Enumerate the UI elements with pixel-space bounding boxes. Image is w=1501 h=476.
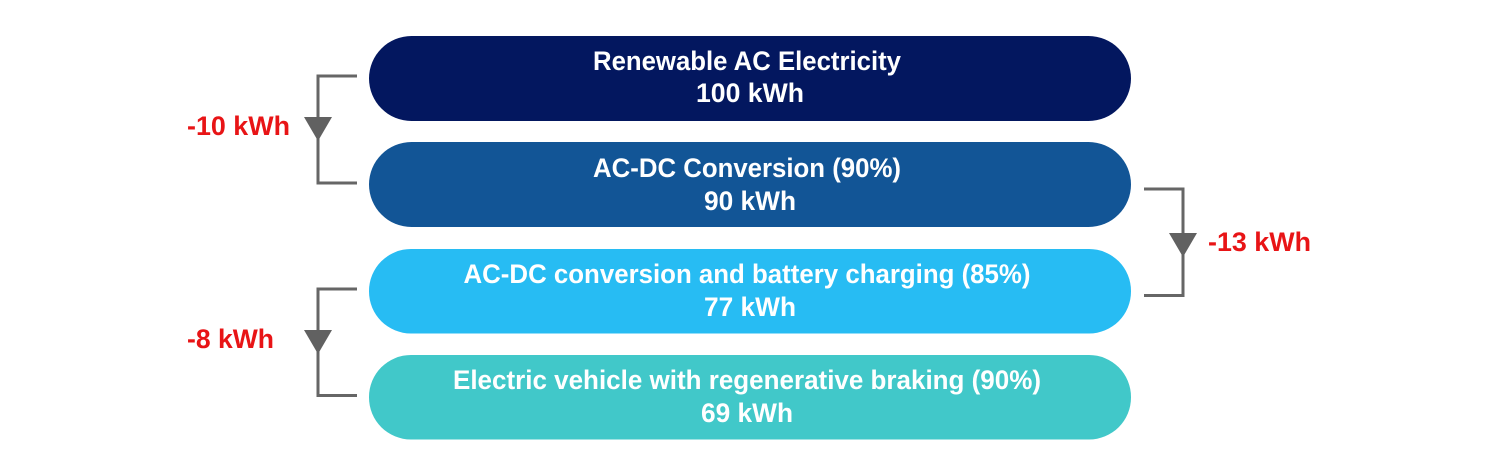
panel: AC-DC conversion: AC-DC Conversion (90%) [593,153,901,183]
panel: AC-DC conversion [369,142,1131,227]
label: -10 kWh: -10 kWh [187,111,290,141]
panel: AC-DC conversion and battery charging: 77 kWh [704,292,796,322]
panel: renewable AC electricity: 100 kWh [696,78,804,108]
arrow: loss from battery charging to vehicle [304,289,357,396]
panel: electric vehicle with regenerative braking [369,355,1131,440]
panel: AC-DC conversion and battery charging: AC-DC conversion and battery charging (85%) [464,259,1030,289]
label: -13 kWh: -13 kWh [1208,227,1311,257]
panel: electric vehicle with regenerative braking: 69 kWh [701,398,793,428]
arrow: loss from AC-DC to battery charging [1144,189,1197,296]
panel: renewable AC electricity: Renewable AC Electricity [593,46,901,76]
panel: electric vehicle with regenerative braking: Electric vehicle with regenerative braking (90%) [453,365,1041,395]
arrow: loss from renewable to AC-DC [304,76,357,183]
panel: AC-DC conversion: 90 kWh [704,186,796,216]
label: -8 kWh: -8 kWh [187,324,274,354]
panel: renewable AC electricity [369,36,1131,121]
panel: AC-DC conversion and battery charging [369,249,1131,334]
